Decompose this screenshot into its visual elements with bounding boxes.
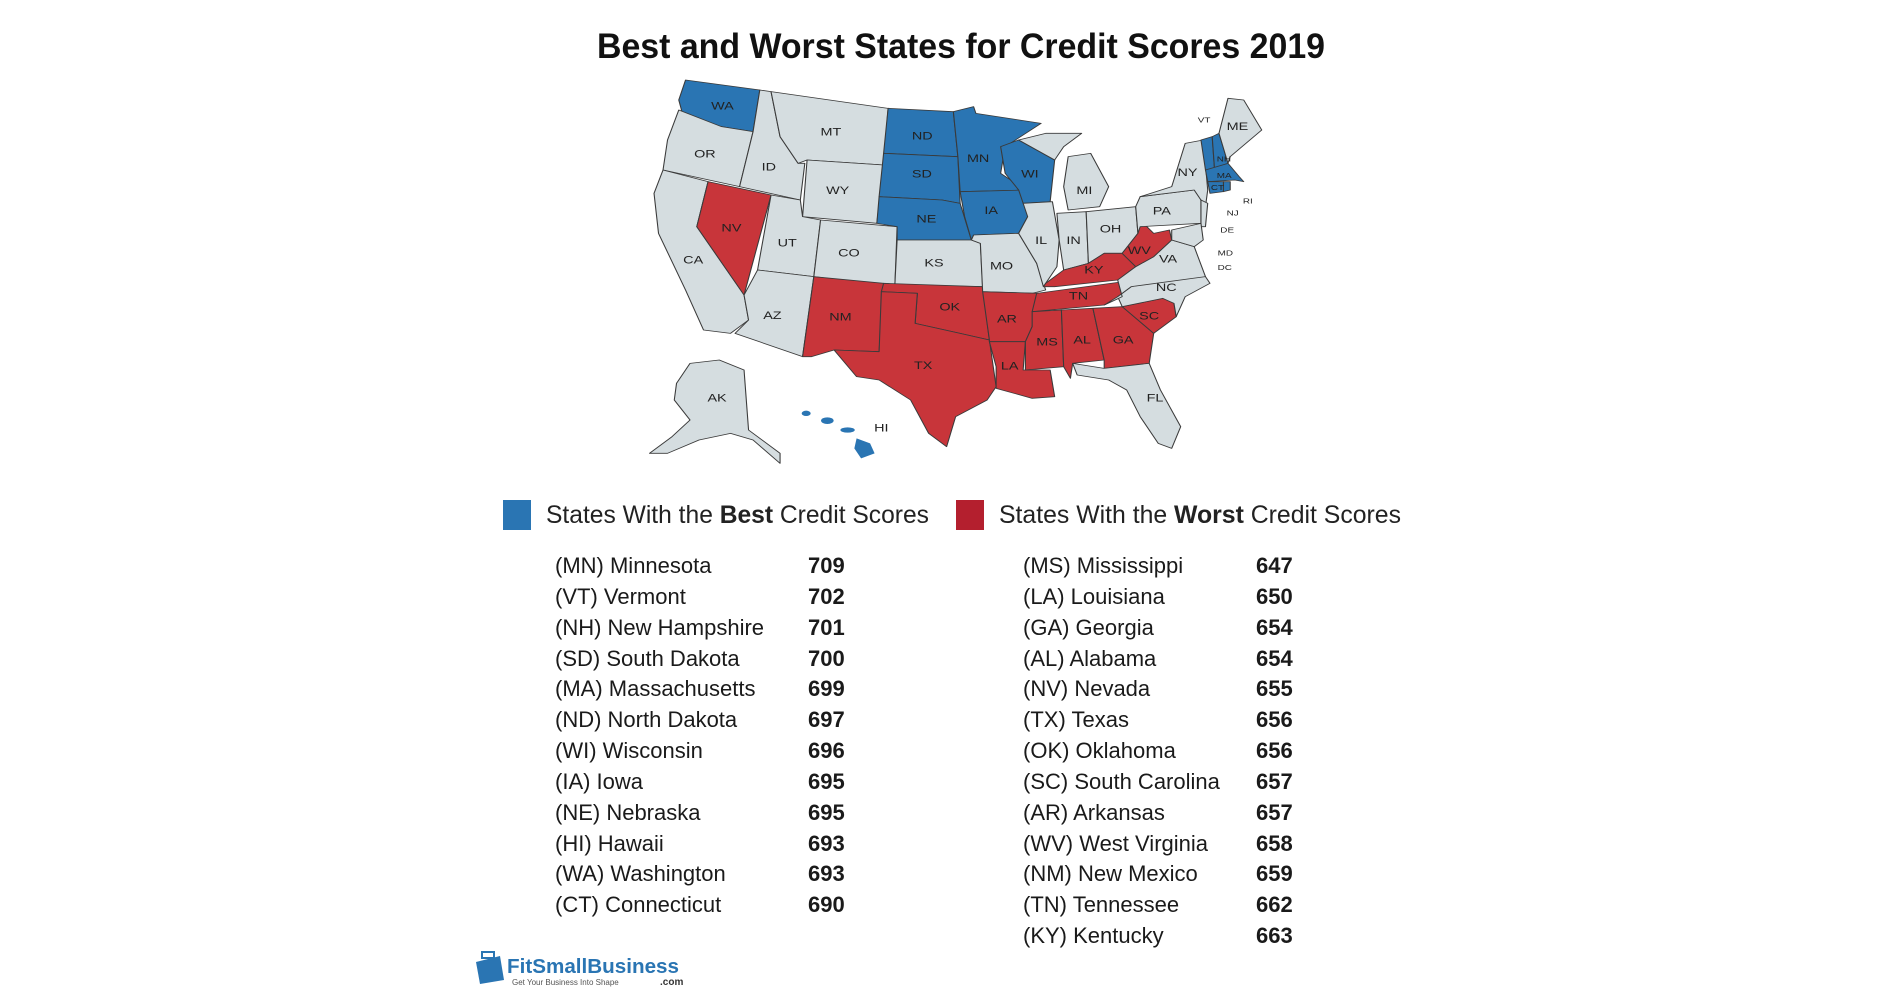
map: US states: AK [707,392,727,404]
map: US states: CT [1211,183,1225,192]
legend: worst: States With the Worst Credit Scores [999,501,1401,529]
map: US states: TN [1069,290,1088,302]
list: best states: 690 [808,892,845,917]
list: best states: 695 [808,769,845,794]
map: US states: UT [778,237,797,249]
map: US states: MI [1076,185,1092,197]
list: best states: 695 [808,800,845,825]
logo: FitSmallBusiness: .com [660,977,683,988]
list: worst states: (LA) Louisiana [1023,584,1166,609]
map: US states: RI [1243,197,1253,205]
list: worst states: (NV) Nevada [1023,676,1151,701]
map: US states: CO [838,247,860,259]
map: US states: WA [711,100,734,112]
list: best states: (ND) North Dakota [555,707,738,732]
map: US states: MN [967,153,989,165]
list: worst states: (KY) Kentucky [1023,923,1164,948]
list: worst states: (TN) Tennessee [1023,892,1179,917]
logo: FitSmallBusiness [476,951,683,988]
map: US states: TX [914,360,933,372]
map: US states: ID [762,161,776,173]
map: US states: VT [1198,116,1211,124]
list: best states: 696 [808,738,845,763]
map: US states: MO [990,260,1013,272]
map: US states: NJ [1227,209,1239,217]
list: best states: 701 [808,615,845,640]
map: US states: GA [1113,334,1134,346]
list: best states: 693 [808,861,845,886]
map: US states: NC [1156,282,1177,294]
map: US states: ME [1227,121,1248,133]
list: worst states: 657 [1256,769,1293,794]
map: US states: NY [1177,167,1198,179]
list: best states: 700 [808,646,845,671]
list: worst states: (GA) Georgia [1023,615,1155,640]
map: US states: WY [826,185,850,197]
list: worst states: 650 [1256,584,1293,609]
list: worst states: 655 [1256,676,1293,701]
list: best states: (IA) Iowa [555,769,644,794]
map: US states: MD [1218,249,1233,257]
map: US states: AL [1073,334,1091,346]
list: best states: 699 [808,676,845,701]
list: best states: 693 [808,831,845,856]
list: best states: (NE) Nebraska [555,800,701,825]
map: US states: HI [874,422,889,434]
map: US states [649,80,1262,464]
map: US states: AR [997,313,1017,325]
map: US states: NM [829,311,852,323]
map: US states: AZ [763,310,782,322]
list: worst states: 647 [1256,553,1293,578]
map: US states: SC [1139,310,1159,322]
list: worst states: 659 [1256,861,1293,886]
map: US states: OH [1100,223,1121,235]
list: worst states: (AL) Alabama [1023,646,1157,671]
list: worst states: (AR) Arkansas [1023,800,1165,825]
list: worst states: 654 [1256,646,1293,671]
map: US states: OK [939,301,961,313]
map: US states: OR [694,148,716,160]
map: US states: WI [1021,168,1039,180]
list: best states: 709 [808,553,845,578]
list: worst states: 663 [1256,923,1293,948]
logo: FitSmallBusiness: FitSmallBusiness [507,956,679,978]
map: US states: ND [912,130,933,142]
map: US states: KY [1084,264,1104,276]
list: best states: (VT) Vermont [555,584,686,609]
map: US states: NE [916,213,936,225]
list: worst states [1023,553,1293,948]
list: best states: 697 [808,707,845,732]
map: US states: IA [984,205,999,217]
list: best states: (WI) Wisconsin [555,738,703,763]
map: US states: WV [1128,245,1152,257]
map: US states: PA [1153,205,1171,217]
list: best states: (WA) Washington [555,861,726,886]
title: Best and Worst States for Credit Scores 2019 [597,27,1325,66]
list: best states: (HI) Hawaii [555,831,664,856]
list: worst states: 657 [1256,800,1293,825]
map: US states: DE [1220,226,1234,234]
list: worst states: (NM) New Mexico [1023,861,1198,886]
map: US states: MT [821,126,842,138]
list: worst states: (MS) Mississippi [1023,553,1183,578]
map: US states: MS [1036,336,1058,348]
map: US states: MA [1217,171,1232,180]
legend [503,500,1401,530]
list: worst states: 654 [1256,615,1293,640]
map: US states: KS [924,257,944,269]
list: best states: 702 [808,584,845,609]
map: US states: NV [721,222,742,234]
list: best states: (MA) Massachusetts [555,676,756,701]
list: worst states: (OK) Oklahoma [1023,738,1177,763]
list: worst states: (WV) West Virginia [1023,831,1209,856]
map: US states: LA [1001,360,1019,372]
map: US states: VA [1159,253,1178,265]
list: worst states: (SC) South Carolina [1023,769,1221,794]
list: best states: (CT) Connecticut [555,892,721,917]
map: US states: IN [1066,235,1081,247]
map: US states: IL [1035,235,1047,247]
list: worst states: 658 [1256,831,1293,856]
map: US states: NH [1217,155,1231,163]
list: worst states: 656 [1256,707,1293,732]
list: best states: (SD) South Dakota [555,646,740,671]
logo: FitSmallBusiness: Get Your Business Into Shape [512,978,619,987]
map: US states: FL [1147,392,1163,404]
legend: best: States With the Best Credit Scores [546,501,929,529]
list: best states: (NH) New Hampshire [555,615,764,640]
map: US states: DC [1218,263,1232,272]
list: best states: (MN) Minnesota [555,553,712,578]
map: US states: CA [683,254,704,266]
list: worst states: 662 [1256,892,1293,917]
map: US states: SD [912,168,932,180]
list: worst states: 656 [1256,738,1293,763]
icon: briefcase [476,952,504,984]
list: best states [555,553,845,917]
list: worst states: (TX) Texas [1023,707,1129,732]
